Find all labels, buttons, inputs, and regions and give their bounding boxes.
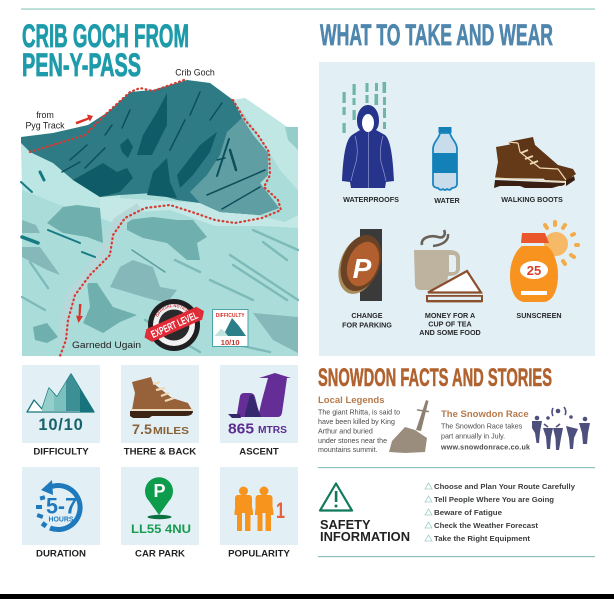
- list: safety tips: Beware of Fatigue: [434, 508, 502, 517]
- map panel: mountain route: [20, 68, 300, 357]
- badge: difficulty 10/10: [212, 310, 248, 347]
- list: safety tips: Check the Weather Forecast: [434, 521, 538, 530]
- label: duration: DURATION: [36, 548, 86, 560]
- map label: from Pyg Track: Pyg Track: [25, 120, 65, 130]
- dark creases: [21, 172, 165, 272]
- text block: local legends: Arthur and buried: [318, 428, 373, 436]
- label: money for tea and food: AND SOME FOOD: [419, 328, 481, 337]
- terrain patches: [33, 205, 207, 343]
- mountain: Crib Goch: [21, 80, 279, 215]
- text block: the Snowdon Race: part annually in July.: [441, 432, 505, 440]
- panel: what to take and wear: [319, 62, 595, 356]
- label: popularity: POPULARITY: [228, 548, 291, 560]
- heading: safety information: SAFETY: [320, 517, 370, 532]
- list: safety tips: Take the Right Equipment: [434, 534, 530, 543]
- title: Crib Goch from Pen-y-Pass: [22, 18, 189, 83]
- icon: sunscreen bottle: 25: [527, 263, 541, 278]
- tile: there and back: MILES: [153, 425, 189, 437]
- icon: sun: [544, 222, 578, 264]
- text block: local legends: [318, 395, 400, 454]
- label: walking boots: WALKING BOOTS: [501, 195, 563, 204]
- label: there and back: THERE & BACK: [124, 446, 196, 458]
- label: ascent: ASCENT: [239, 446, 279, 458]
- badge: difficulty 10/10: 10/10: [221, 338, 240, 347]
- tile: difficulty: [22, 365, 100, 443]
- arrow: toward Garnedd Ugain: [76, 304, 83, 323]
- tile: car park: P: [153, 481, 166, 501]
- tile: car park: [121, 467, 199, 545]
- icon: warning triangle: [320, 484, 352, 510]
- tile: popularity: [220, 467, 298, 545]
- icon: sunscreen bottle: [510, 233, 558, 302]
- text block: local legends: mountains summit.: [318, 446, 378, 454]
- title: Crib Goch from Pen-y-Pass: PEN-Y-PASS: [22, 47, 141, 83]
- list: safety tips: [425, 482, 576, 543]
- icon: tea and sandwich: [414, 230, 483, 302]
- text block: the Snowdon Race: www.snowdonrace.co.uk: [440, 444, 530, 452]
- map label: Crib Goch: Crib Goch: [175, 68, 215, 78]
- icon: waterproof jacket: [342, 105, 394, 188]
- label: car park: CAR PARK: [135, 548, 185, 560]
- label: water: WATER: [434, 196, 461, 205]
- tile: ascent: [220, 365, 298, 443]
- text block: local legends: The giant Rhitta, is said to: [318, 408, 400, 416]
- text block: local legends: Local Legends: [318, 395, 385, 406]
- light track band: [62, 208, 140, 345]
- tile: ascent: 865: [228, 422, 254, 438]
- tile: difficulty: 10/10: [38, 416, 84, 434]
- tile: duration: [22, 467, 100, 545]
- label: difficulty: DIFFICULTY: [33, 446, 89, 458]
- text block: local legends: have been killed by King: [318, 418, 395, 426]
- badge: expert level: [144, 299, 204, 351]
- icon: parking sign: P: [353, 253, 372, 284]
- map label: from Pyg Track: from: [36, 110, 54, 120]
- label: sunscreen: SUNSCREEN: [516, 311, 562, 320]
- tile: ascent: MTRS: [258, 424, 287, 436]
- icon: water bottle: [433, 127, 457, 190]
- text block: the Snowdon Race: The Snowdon Race takes: [441, 422, 523, 430]
- label: waterproofs: WATERPROOFS: [343, 195, 399, 204]
- route: dotted red trail: [30, 79, 281, 356]
- icon: parking sign: [331, 229, 402, 301]
- list: safety tips: Tell People Where You are Going: [434, 495, 554, 504]
- tile: duration: 5-7: [46, 494, 77, 518]
- tile: duration: HOURS: [48, 516, 74, 524]
- badge: expert level: EXPERT LEVEL: [149, 309, 200, 341]
- icon: runners: [532, 407, 590, 450]
- label: money for tea and food: CUP OF TEA: [428, 320, 472, 329]
- map label: Garnedd Ugain: Garnedd Ugain: [72, 340, 141, 350]
- icon: walking boots: [494, 137, 576, 188]
- badge: difficulty 10/10: DIFFICULTY: [216, 313, 245, 319]
- heading: safety information: INFORMATION: [320, 529, 410, 544]
- text block: the Snowdon Race: [440, 409, 530, 452]
- tile: car park: LL55 4NU: [131, 522, 191, 536]
- ridge streaks: [22, 230, 298, 352]
- label: change for parking: CHANGE: [351, 311, 383, 320]
- text block: local legends: under stones near the: [318, 437, 387, 445]
- title: Crib Goch from Pen-y-Pass: CRIB GOCH FROM: [22, 18, 189, 54]
- tile: popularity: 1: [276, 498, 285, 523]
- list: safety tips: Choose and Plan Your Route Carefully: [434, 482, 576, 491]
- tile: there and back: 7.5: [132, 421, 152, 437]
- icon: rain: [342, 82, 386, 133]
- tile: there and back: [121, 365, 199, 443]
- icon: sword in stones: [389, 400, 429, 453]
- label: money for tea and food: MONEY FOR A: [425, 311, 475, 320]
- badge: expert level: OFFICIAL NOTICE: [156, 304, 189, 317]
- arrow: from Pyg Track: [76, 114, 93, 124]
- label: change for parking: FOR PARKING: [342, 320, 392, 329]
- text block: the Snowdon Race: The Snowdon Race: [441, 409, 529, 420]
